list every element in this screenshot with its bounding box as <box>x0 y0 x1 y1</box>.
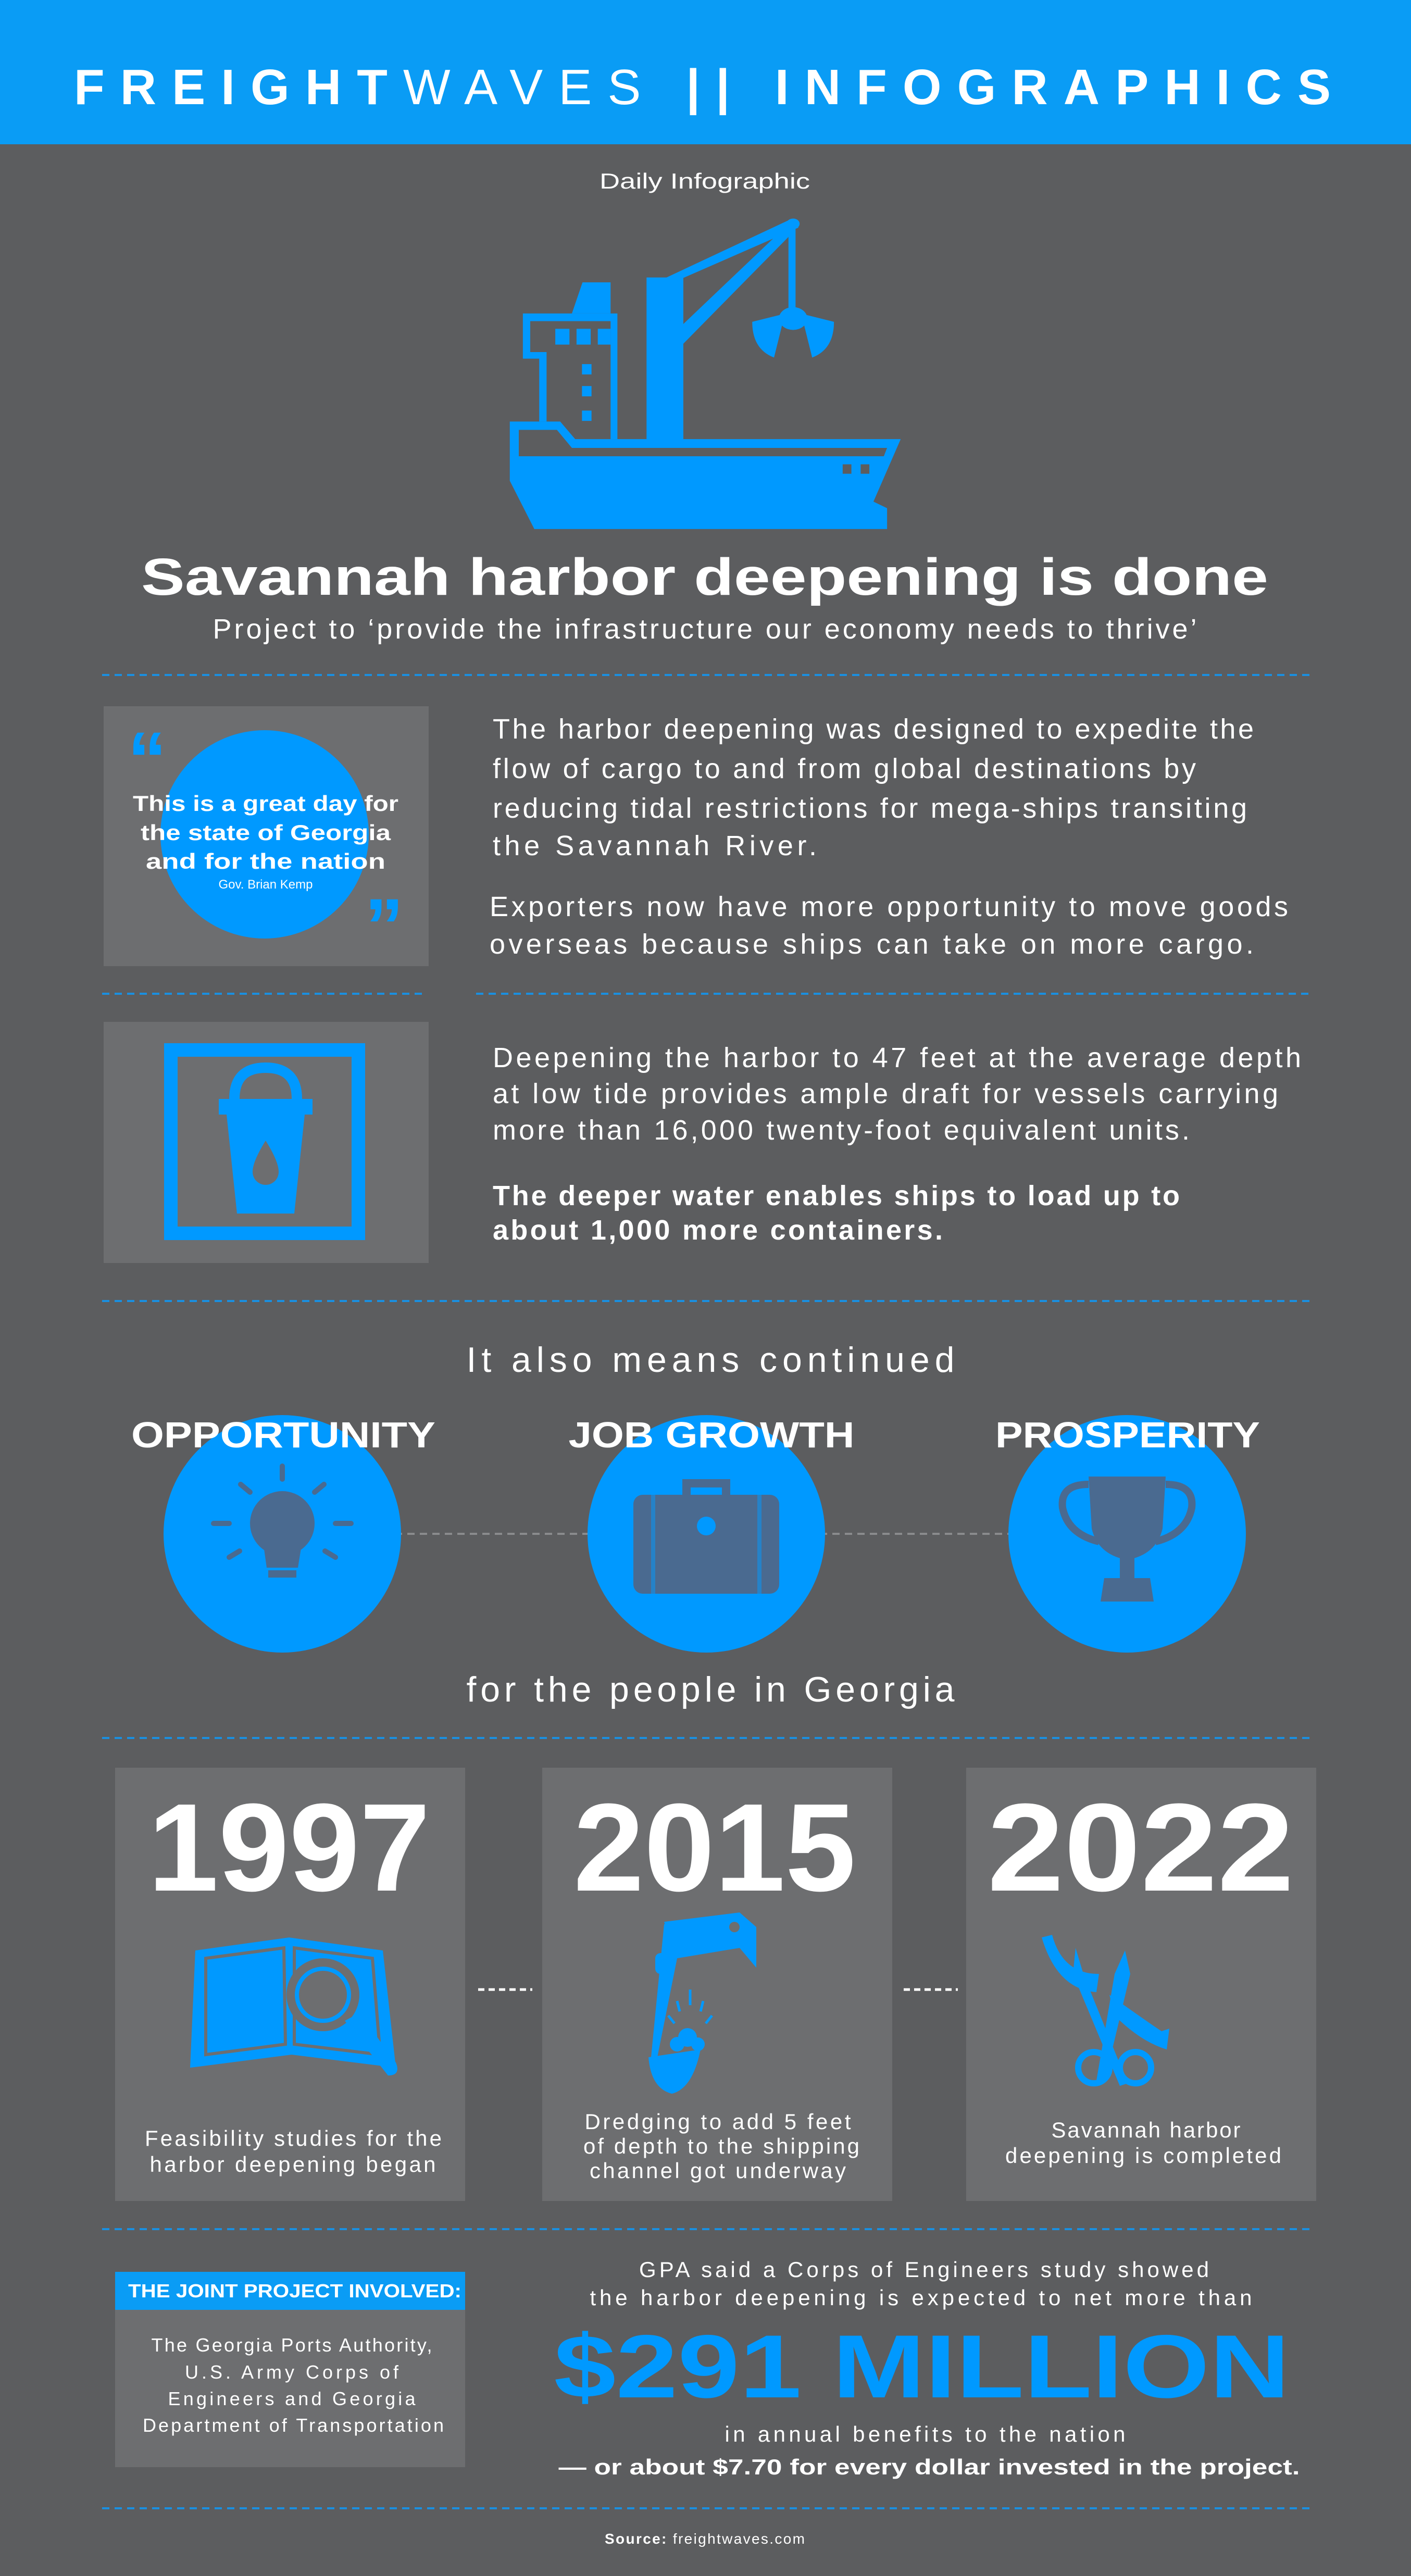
icon: opening quote: “ <box>128 716 167 803</box>
panel: 2022: deepening is completed <box>1005 2143 1281 2168</box>
icon: book with magnifier <box>190 1937 397 2075</box>
panel: 2015: of depth to the shipping <box>583 2134 859 2158</box>
text block: 47 feet depth: Deepening the harbor to 47 feet at the average depth <box>493 1042 1301 1073</box>
quote text <box>133 791 398 892</box>
callout: $291 million benefits: GPA said a Corps of Engineers study showed <box>639 2257 1209 2282</box>
callout: $291 million benefits: — or about $7.70 for every dollar invested in the project. <box>558 2455 1300 2479</box>
header bar <box>0 0 1411 144</box>
panel: 2022: 2022 <box>988 1778 1294 1917</box>
panel: 2022 <box>966 1768 1316 2201</box>
text block: harbor deepening purpose: reducing tidal restrictions for mega-ships transiting <box>493 793 1247 824</box>
benefit: prosperity <box>995 1415 1260 1653</box>
panel: joint project: The Georgia Ports Authority, <box>151 2334 432 2356</box>
panel: 1997 <box>115 1768 465 2201</box>
quote text: the state of Georgia <box>141 820 391 845</box>
panel: joint project: THE JOINT PROJECT INVOLVED: <box>128 2280 461 2302</box>
benefit: opportunity: OPPORTUNITY <box>131 1415 435 1455</box>
text block: 47 feet depth <box>493 1042 1301 1246</box>
header title: FREIGHT WAVES || INFOGRAPHICS <box>74 59 1331 116</box>
panel: 2015 <box>542 1768 892 2201</box>
callout: $291 million benefits: in annual benefits to the nation <box>725 2422 1125 2446</box>
text block: 47 feet depth: The deeper water enables ships to load up to <box>493 1180 1180 1211</box>
benefit: job growth: JOB GROWTH <box>569 1415 854 1455</box>
text block: harbor deepening purpose: flow of cargo to and from global destinations by <box>493 753 1196 784</box>
text block: 47 feet depth: at low tide provides ample draft for vessels carrying <box>493 1078 1278 1109</box>
quote circle <box>160 730 369 939</box>
heading: it also means continued: It also means continued <box>467 1340 954 1380</box>
subheading: daily infographic: Daily Infographic <box>600 169 810 193</box>
icon: dredging excavator <box>648 1912 756 2094</box>
panel: joint project: Engineers and Georgia <box>168 2388 416 2409</box>
title: Savannah harbor deepening is done <box>141 548 1268 606</box>
panel: 1997: Feasibility studies for the <box>145 2126 442 2150</box>
icon: closing quote: ” <box>365 882 404 970</box>
text block: harbor deepening purpose: Exporters now have more opportunity to move goods <box>490 891 1288 922</box>
icon: suitcase <box>633 1479 779 1594</box>
callout: $291 million benefits <box>554 2257 1300 2479</box>
callout: $291 million benefits: $291 MILLION <box>554 2317 1290 2417</box>
icon: scissors cutting ribbon <box>1042 1935 1169 2086</box>
text block: harbor deepening purpose: overseas because ships can take on more cargo. <box>490 929 1254 960</box>
text block: harbor deepening purpose: the Savannah River. <box>493 830 817 861</box>
benefit: opportunity <box>131 1415 435 1653</box>
panel: 2022: Savannah harbor <box>1051 2118 1241 2142</box>
text block: harbor deepening purpose: The harbor deepening was designed to expedite the <box>493 714 1254 745</box>
source: Source: freightwaves.com <box>605 2531 805 2547</box>
callout: $291 million benefits: the harbor deepening is expected to net more than <box>590 2285 1252 2310</box>
panel: quote <box>104 706 429 970</box>
benefit: prosperity: PROSPERITY <box>995 1415 1260 1455</box>
panel: bucket icon <box>104 1022 429 1263</box>
panel: 1997: 1997 <box>148 1778 430 1917</box>
quote text: Gov. Brian Kemp <box>219 878 313 892</box>
text block: 47 feet depth: about 1,000 more containers. <box>493 1215 943 1246</box>
quote text: This is a great day for <box>133 791 398 816</box>
icon: light bulb <box>214 1466 351 1578</box>
icon: ship with crane <box>510 219 901 529</box>
heading: for the people in georgia: for the people in Georgia <box>467 1670 955 1709</box>
text block: harbor deepening purpose <box>490 714 1288 960</box>
panel: 2015: channel got underway <box>590 2158 846 2183</box>
panel: joint project: U.S. Army Corps of <box>185 2361 399 2383</box>
icon: trophy <box>1063 1477 1192 1602</box>
quote text: and for the nation <box>146 849 385 873</box>
panel: joint project <box>115 2272 465 2467</box>
panel: joint project: Department of Transportation <box>143 2415 444 2436</box>
panel: 1997: harbor deepening began <box>150 2152 435 2177</box>
panel: 2015: Dredging to add 5 feet <box>584 2109 851 2134</box>
subtitle: Project to ‘provide the infrastructure our economy needs to thrive’ <box>213 614 1197 645</box>
benefit: job growth <box>569 1415 854 1653</box>
panel: 2015: 2015 <box>573 1778 856 1917</box>
text block: 47 feet depth: more than 16,000 twenty-foot equivalent units. <box>493 1115 1190 1146</box>
